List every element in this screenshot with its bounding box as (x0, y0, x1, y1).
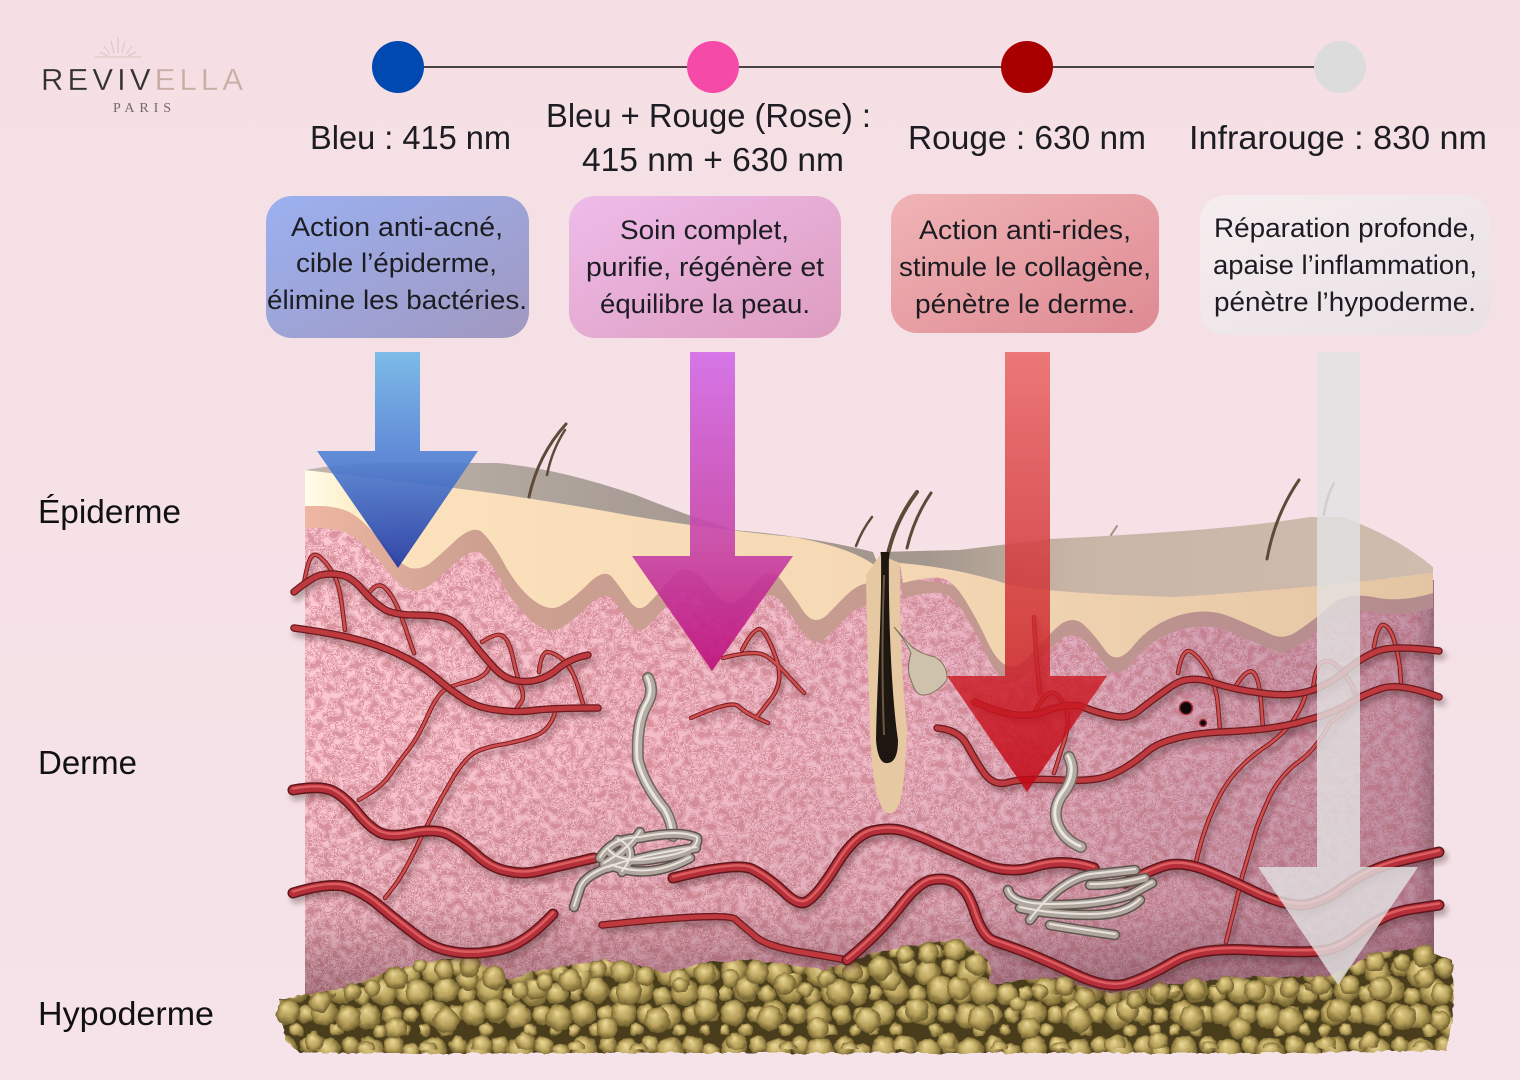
hypodermis fat layer (276, 939, 1454, 1053)
label: dermis: Derme (38, 744, 137, 781)
panel: red benefit (891, 194, 1159, 333)
timeline (372, 41, 1366, 93)
panel: rose benefit: équilibre la peau. (600, 289, 810, 319)
epidermis (305, 470, 1433, 667)
blue dot (372, 41, 424, 93)
panel: infrared benefit: apaise l’inflammation, (1213, 250, 1477, 280)
blood vessels (293, 555, 1442, 990)
infrared dot (1314, 41, 1366, 93)
logo: Revivella Paris (41, 37, 243, 116)
arrow: infrared light (1258, 352, 1418, 985)
panel: rose benefit: Soin complet, (620, 215, 789, 245)
arrow: rose light (632, 352, 793, 671)
hair follicle (866, 552, 907, 813)
heading: blue plus red (546, 97, 871, 178)
panel: blue benefit: Action anti-acné, (291, 212, 503, 242)
skin cross-section illustration (276, 424, 1454, 1053)
panel: blue benefit: cible l’épiderme, (296, 248, 497, 278)
panel: blue benefit (266, 196, 529, 338)
panel: red benefit: pénètre le derme. (915, 289, 1135, 319)
skin surface (305, 463, 1433, 597)
heading: blue plus red: Bleu + Rouge (Rose) : (546, 97, 871, 134)
panel: rose benefit: purifie, régénère et (586, 252, 825, 282)
heading: blue: Bleu : 415 nm (310, 119, 511, 156)
arrow: blue light (317, 352, 478, 568)
heading: red: Rouge : 630 nm (908, 119, 1146, 156)
skin pores (1180, 702, 1206, 726)
panel: red benefit: Action anti-rides, (919, 215, 1131, 245)
panel: rose benefit (569, 196, 841, 338)
panel: infrared benefit: pénètre l’hypoderme. (1214, 287, 1476, 317)
panel: red benefit: stimule le collagène, (899, 252, 1151, 282)
hairs (529, 424, 1334, 580)
pink dot (687, 41, 739, 93)
label: hypodermis: Hypoderme (38, 995, 214, 1032)
panel: infrared benefit (1200, 195, 1490, 335)
dermis (305, 528, 1434, 994)
logo wordmark: REVIVELLA (41, 62, 243, 97)
papillary band (305, 492, 1433, 682)
icon: sun rays (95, 37, 141, 57)
arrow: red light (947, 352, 1107, 792)
heading: blue plus red: 415 nm + 630 nm (582, 141, 844, 178)
nerve fibres (574, 677, 1152, 935)
heading: infrared: Infrarouge : 830 nm (1189, 119, 1487, 156)
panel: infrared benefit: Réparation profonde, (1214, 213, 1476, 243)
label: epidermis: Épiderme (38, 493, 181, 530)
logo subtitle: PARIS (113, 101, 171, 116)
panel: blue benefit: élimine les bactéries. (267, 285, 527, 315)
sebaceous gland (894, 627, 947, 695)
red dot (1001, 41, 1053, 93)
